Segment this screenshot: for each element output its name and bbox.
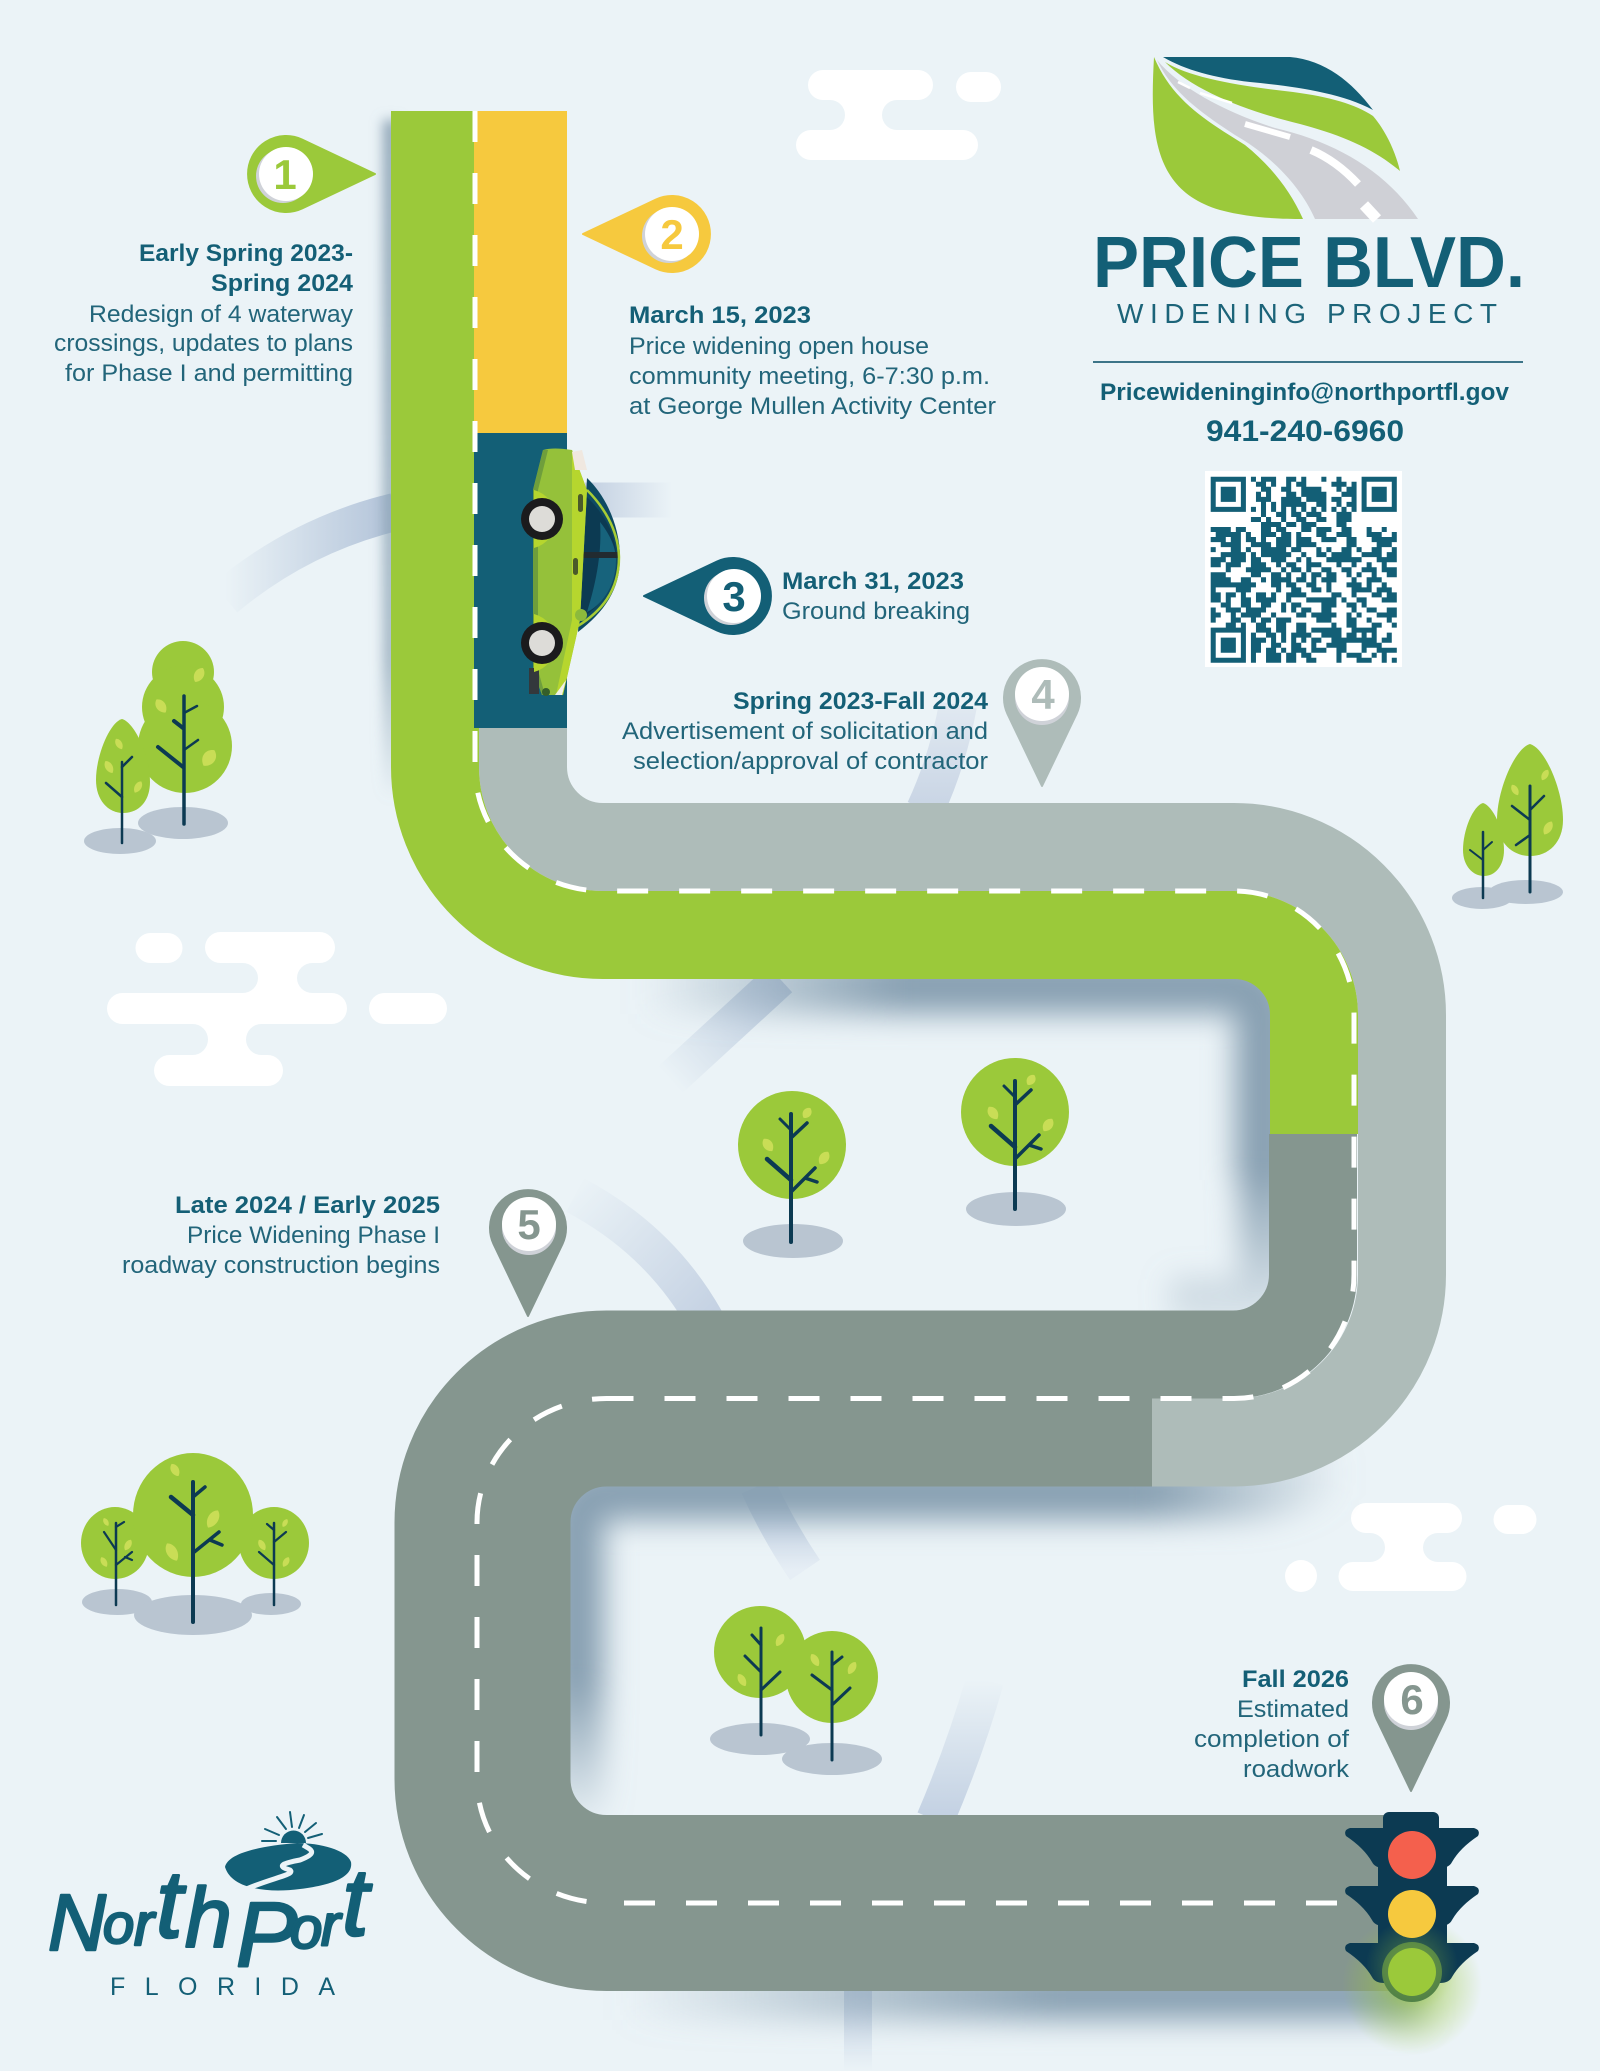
road: light grey lane — [523, 728, 1402, 1442]
text: milestone 1: Spring 2024 — [211, 270, 354, 297]
text: milestone 2: March 15, 2023 — [629, 302, 811, 329]
logo title: PRICE BLVD.: PRICE BLVD. — [1093, 223, 1525, 303]
text: milestone 4: selection/approval of contractor — [633, 748, 988, 775]
road: yellow segment — [474, 111, 567, 433]
road: green lane — [435, 111, 1314, 1134]
trees: lower left trio — [81, 1453, 309, 1635]
text: milestone 6: completion of — [1194, 1726, 1349, 1753]
tree: centre right — [961, 1058, 1069, 1226]
text: milestone 1 — [54, 240, 354, 387]
wordmark: r — [134, 1891, 156, 1958]
text: milestone 1: Redesign of 4 waterway — [89, 301, 353, 328]
road cast shadows — [576, 985, 1420, 1995]
cloud: left middle — [107, 932, 447, 1086]
river winding line — [242, 1845, 312, 1891]
wordmark: N — [48, 1878, 106, 1967]
text: milestone 6: roadwork — [1243, 1756, 1350, 1783]
trees: upper left pair — [84, 641, 232, 854]
road left edge soft shadow — [383, 120, 399, 800]
trees: upper right pair — [1452, 744, 1563, 909]
icon: green car — [521, 448, 620, 696]
traffic light — [1342, 1812, 1482, 2055]
text: milestone 4: Advertisement of solicitation and — [622, 718, 988, 745]
text: milestone 3 — [782, 568, 970, 625]
pin 5: 5 — [517, 1201, 541, 1248]
pin 4 — [1004, 660, 1080, 786]
text: milestone 6: Estimated — [1237, 1696, 1349, 1723]
cloud: top centre — [796, 70, 1001, 160]
wordmark: o — [103, 1892, 134, 1955]
FLORIDA: FLORIDA — [110, 1973, 335, 2001]
text: milestone 4: Spring 2023-Fall 2024 — [733, 688, 989, 715]
wordmark: t — [156, 1851, 186, 1958]
text: milestone 2 — [629, 302, 996, 420]
text: milestone 1: for Phase I and permitting — [65, 360, 353, 387]
pin 6 — [1373, 1665, 1449, 1791]
pin 3 — [644, 558, 771, 634]
text: milestone 6 — [1194, 1666, 1350, 1783]
pin 2 — [583, 196, 710, 272]
tree: centre left — [738, 1091, 846, 1258]
pin 1 — [248, 136, 375, 212]
text: milestone 3: March 31, 2023 — [782, 568, 964, 595]
text: milestone 2: Price widening open house — [629, 333, 929, 360]
text: milestone 1: crossings, updates to plans — [54, 330, 353, 357]
text: milestone 5: Late 2024 / Early 2025 — [175, 1192, 440, 1219]
contact: phone: 941-240-6960 — [1206, 415, 1404, 448]
text: milestone 5 — [122, 1192, 440, 1279]
wordmark: o — [290, 1896, 322, 1961]
text: milestone 5: Price Widening Phase I — [187, 1222, 440, 1249]
text: milestone 5: roadway construction begins — [122, 1252, 440, 1279]
QR code — [1205, 471, 1402, 667]
pin 3: 3 — [722, 573, 746, 620]
road: dark grey section — [482, 1134, 1415, 1903]
wordmark: t — [342, 1849, 372, 1956]
road: teal segment — [474, 433, 567, 728]
text: milestone 2: community meeting, 6-7:30 p.m. — [629, 363, 990, 390]
text: milestone 2: at George Mullen Activity Center — [629, 393, 996, 420]
logo subtitle: WIDENING PROJECT: WIDENING PROJECT — [1117, 298, 1497, 329]
wordmark: P — [236, 1884, 297, 1986]
pin 1: 1 — [273, 151, 297, 198]
text: milestone 3: Ground breaking — [782, 598, 970, 625]
pin 4: 4 — [1031, 671, 1055, 718]
cloud: small puff — [1285, 1560, 1317, 1592]
trees: lower centre pair — [710, 1606, 882, 1775]
pin 5 — [490, 1190, 566, 1316]
text: milestone 4 — [622, 688, 989, 775]
logo: leaf and road — [1153, 57, 1418, 219]
wordmark: h — [185, 1871, 232, 1965]
pin 2: 2 — [660, 211, 684, 258]
divider — [1093, 361, 1523, 363]
logo: North Port Florida — [48, 1812, 372, 2001]
river bands behind the road — [225, 500, 985, 2071]
road: centre dashes — [475, 111, 1354, 1903]
river emblem — [225, 1843, 351, 1890]
text: milestone 6: Fall 2026 — [1242, 1666, 1349, 1693]
road — [435, 111, 1415, 1903]
pin 6: 6 — [1400, 1676, 1424, 1723]
cloud: right lower — [1338, 1503, 1536, 1591]
sun — [281, 1830, 306, 1843]
wordmark: r — [321, 1893, 343, 1958]
contact: email: Pricewideninginfo@northportfl.gov — [1100, 379, 1510, 406]
sun rays — [262, 1812, 322, 1841]
text: milestone 1: Early Spring 2023- — [139, 240, 353, 267]
